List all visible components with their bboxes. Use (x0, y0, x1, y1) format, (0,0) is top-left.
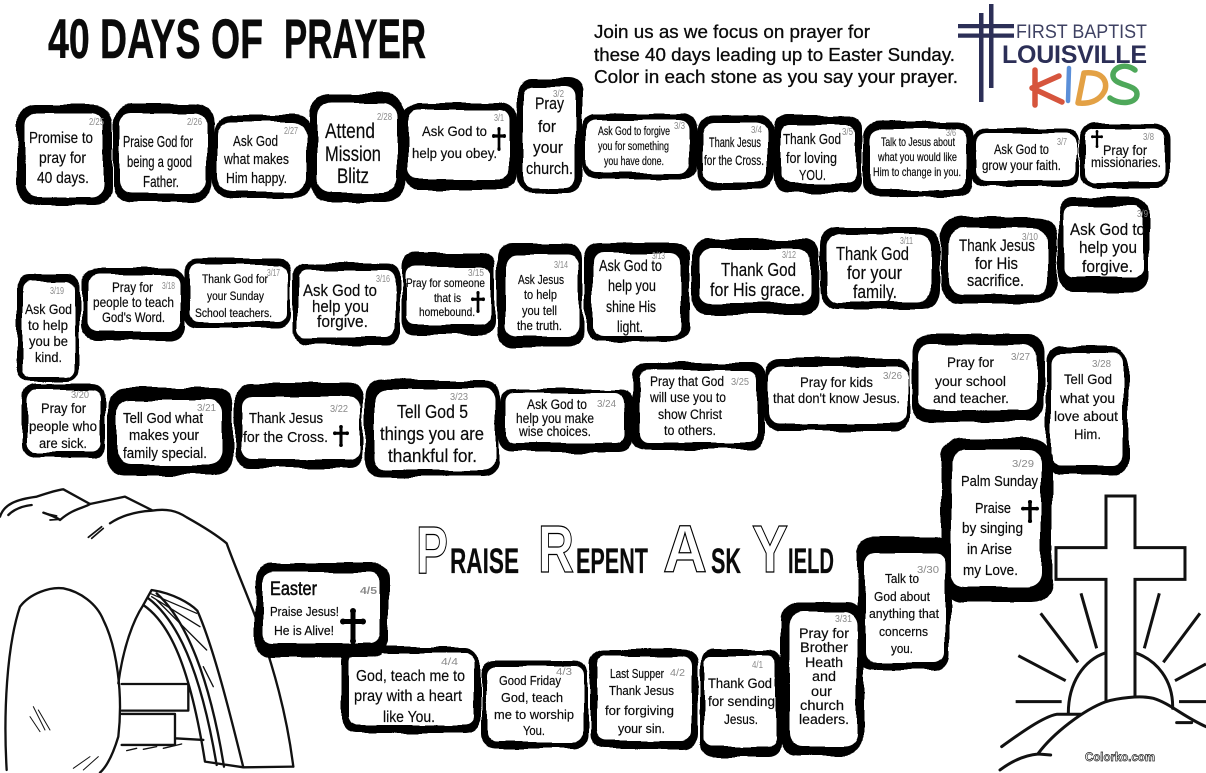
stone 4/2: Last Supper (610, 667, 664, 681)
stone 4/4: 4/4 (441, 657, 459, 668)
stone 3/26: Pray for kids (800, 374, 873, 390)
stone 3/5 (775, 115, 862, 193)
stone 3/28: Tell God (1064, 371, 1112, 387)
intro text: Join us as we focus on prayer for (594, 21, 870, 42)
stone 3/12: 3/12 (782, 250, 796, 261)
stone 3/21 (107, 388, 233, 475)
stone 3/31: leaders. (799, 712, 849, 727)
stone 3/19 (17, 275, 80, 382)
stone 3/12: for His grace. (710, 279, 805, 300)
stone 3/28: what you (1059, 390, 1115, 406)
stone 4/2: for forgiving (605, 704, 674, 718)
stone 3/22 (235, 383, 363, 468)
stone 3/9: Ask God to (1070, 220, 1145, 239)
stone 3/7 (972, 128, 1080, 187)
praise repent ask yield heading: R (538, 512, 574, 587)
stone 3/27 (912, 334, 1045, 422)
stone 3/24 (500, 389, 633, 452)
stone 3/7: grow your faith. (982, 158, 1061, 173)
stone 3/6: 3/6 (946, 128, 956, 139)
stone 3/5: 3/5 (842, 127, 853, 138)
stone 3/7: 3/7 (1057, 137, 1067, 148)
stone 4/3: You. (523, 723, 545, 738)
stone 3/25: 3/25 (731, 377, 749, 388)
stone 3/23: things you are (380, 424, 484, 444)
stone 3/21: family special. (123, 446, 207, 462)
stone 3/23: thankful for. (388, 446, 477, 466)
stone 3/3 (582, 113, 697, 180)
stone 3/5: for loving (786, 150, 837, 167)
stone 3/21: makes your (129, 428, 199, 444)
stone 3/30: concerns (879, 624, 928, 639)
stone 2/27: 2/27 (284, 126, 298, 137)
stone 3/20: Pray for (41, 401, 86, 416)
stone 4/3 (481, 660, 588, 749)
stone 3/31: Heath (805, 655, 843, 670)
stone 2/25: 40 days. (37, 170, 89, 187)
stone 3/31: and (812, 669, 836, 684)
stone 3/16 (293, 263, 400, 345)
praise repent ask yield heading: EPENT (576, 542, 648, 581)
stone 3/16: help you (312, 298, 369, 316)
stone 3/5: Thank God (783, 131, 841, 148)
stone 3/28 (1047, 346, 1128, 475)
icon: small cross (471, 291, 485, 313)
stone 2/25: Promise to (29, 130, 93, 147)
stone 4/5 Easter: Praise Jesus! (270, 604, 339, 619)
stone 3/20: 3/20 (71, 390, 89, 401)
stone 4/3: Good Friday (499, 673, 561, 688)
stone 3/17: Thank God for (202, 274, 268, 286)
stone 3/9: forgive. (1082, 257, 1133, 276)
stone 3/13: Ask God to (599, 258, 662, 275)
stone 2/26: being a good (127, 154, 192, 171)
stone 3/17: 3/17 (267, 268, 280, 279)
stone 3/1: Ask God to (422, 123, 487, 139)
stone 2/28: Blitz (337, 165, 369, 188)
stone 3/14: the truth. (517, 318, 562, 333)
stone 3/18: God's Word. (102, 309, 165, 325)
stone 3/10: Thank Jesus (959, 236, 1035, 255)
stone 3/23 (365, 380, 500, 477)
stone 4/2: Thank Jesus (609, 684, 674, 698)
stone 3/28: love about (1054, 408, 1118, 424)
stone 3/17: your Sunday (207, 291, 264, 303)
stone 3/8: 3/8 (1143, 132, 1154, 143)
stone 3/31 (780, 603, 864, 756)
stone 3/4 (697, 115, 775, 190)
stone 4/2: 4/2 (670, 668, 685, 679)
stone 4/1: Thank God (708, 675, 772, 691)
stone 3/24: Ask God to (527, 397, 587, 412)
stone 4/1: 4/1 (752, 660, 763, 671)
stone 3/27: 3/27 (1011, 352, 1030, 363)
stone 3/31: 3/31 (835, 614, 852, 625)
stone 3/2: Pray (535, 94, 564, 113)
stone 3/29: 3/29 (1012, 459, 1034, 470)
stone 4/5 Easter: 4/5 (360, 586, 378, 597)
stone 3/18: Pray for (112, 279, 153, 295)
praise repent ask yield heading: SK (711, 542, 741, 581)
stone 3/16: forgive. (317, 313, 368, 331)
intro text: these 40 days leading up to Easter Sunday. (594, 44, 955, 65)
icon: small cross (1091, 130, 1103, 148)
icon: small cross (1021, 500, 1039, 523)
stone 3/23: 3/23 (450, 392, 468, 403)
stone 3/15: homebound. (419, 305, 475, 319)
stone 3/29 (941, 438, 1052, 602)
stone 3/2: 3/2 (553, 89, 564, 100)
stone 3/27: your school (935, 373, 1006, 389)
stone 2/25 (17, 105, 112, 205)
stone 4/2 (590, 649, 698, 749)
stone 3/13: help you (608, 278, 656, 295)
intro text (594, 21, 958, 87)
logo: First Baptist Louisville Kids: FIRST BAPTIST (1016, 22, 1147, 43)
stone 3/13 (585, 243, 690, 342)
stone 4/2: your sin. (618, 722, 665, 736)
stone 3/15: that is (434, 291, 461, 305)
praise repent ask yield heading: A (663, 512, 707, 587)
stone 3/15 (402, 253, 495, 335)
stone 3/14: to help (524, 287, 557, 302)
stone 3/24: 3/24 (597, 399, 616, 410)
icon: small cross (492, 127, 506, 151)
stone 3/10: for His (975, 254, 1018, 273)
stone 4/1: Jesus. (724, 711, 758, 727)
stone 3/1: help you obey. (412, 145, 497, 161)
stone 3/2: church. (526, 159, 573, 178)
stone 3/26: that don't know Jesus. (773, 390, 900, 406)
stone 3/20 (23, 384, 105, 458)
stone 2/25: pray for (39, 150, 87, 167)
stone 3/26 (765, 358, 910, 431)
stone 3/28: Him. (1074, 426, 1101, 442)
title: 40 DAYS OF (48, 7, 263, 70)
stone 3/27: Pray for (947, 354, 994, 370)
stone 3/30: 3/30 (917, 565, 939, 576)
stone 3/9: help you (1079, 238, 1137, 257)
stone 3/30: Talk to (885, 571, 919, 586)
stone 3/19: you be (29, 333, 68, 349)
stone 3/11: Thank God (836, 244, 909, 264)
illustration: cross on hill with sun rays (1000, 496, 1206, 770)
stone 3/30: God about (874, 589, 930, 604)
icon: small cross (333, 425, 349, 447)
stone 3/14: 3/14 (554, 260, 568, 271)
stone 2/26: 2/26 (187, 117, 202, 128)
stone 4/5 Easter (255, 563, 389, 657)
icon: Easter cross (340, 608, 366, 644)
stone 3/28: 3/28 (1092, 359, 1111, 370)
stone 3/18: people to teach (93, 294, 174, 310)
stone 3/21: Tell God what (123, 411, 203, 427)
stone 3/13: shine His (606, 299, 656, 316)
title: PRAYER (284, 7, 426, 70)
stone 3/9: 3/9 (1137, 209, 1148, 220)
intro text: Color in each stone as you say your prayer. (594, 66, 958, 87)
stone 2/27: Him happy. (226, 170, 287, 187)
stone 3/30: anything that (869, 606, 939, 621)
watermark: Colorko.com: Colorko.com (1085, 750, 1155, 764)
stone 3/2: your (533, 138, 563, 157)
stone 3/27: and teacher. (933, 390, 1009, 406)
stone 4/3: God, teach (501, 690, 563, 705)
stone 3/1 (403, 103, 517, 190)
stone 3/14: Ask Jesus (518, 272, 564, 287)
stone 3/24: help you make (516, 411, 594, 426)
stone 3/23: Tell God 5 (397, 402, 468, 422)
stone 3/30 (857, 537, 950, 670)
stone 3/31: Pray for (799, 626, 850, 641)
stone 3/16: 3/16 (376, 274, 390, 285)
stone 2/27: what makes (223, 151, 289, 168)
stone 3/11: for your (847, 263, 902, 283)
stone 3/11: 3/11 (900, 236, 913, 247)
stone 3/11: family. (853, 282, 897, 302)
stone 3/9 (1058, 197, 1148, 292)
stone 4/1: for sending (708, 693, 775, 709)
stone 3/6 (863, 122, 973, 197)
praise repent ask yield heading: P (416, 513, 448, 588)
stone 2/28: 2/28 (377, 112, 392, 123)
praise repent ask yield heading: RAISE (450, 542, 519, 581)
stone 4/4: God, teach me to (356, 668, 465, 685)
stone 3/4: 3/4 (751, 125, 762, 136)
stone 3/25: Pray that God (650, 374, 724, 389)
stone 3/3: you for something (598, 141, 669, 153)
stone 3/17 (184, 258, 291, 328)
stone 3/17: School teachers. (195, 308, 272, 320)
stone 3/20: are sick. (39, 436, 87, 451)
stone 3/18: 3/18 (162, 281, 175, 292)
stone 3/8 (1081, 124, 1170, 188)
praise repent ask yield heading (416, 512, 834, 588)
stone 2/26 (113, 103, 213, 202)
stone 3/3: you have done. (604, 156, 664, 168)
stone 3/18 (82, 268, 185, 340)
stone 3/15: 3/15 (468, 268, 484, 279)
stone 4/4: like You. (383, 709, 435, 726)
stone 3/24: wise choices. (518, 424, 591, 439)
stone 3/29: by singing (962, 521, 1023, 537)
stone 2/28: Attend (325, 120, 375, 143)
stone 3/10: sacrifice. (967, 271, 1024, 290)
stone 3/16: Ask God to (303, 282, 377, 300)
stone 3/13: light. (617, 319, 643, 336)
stone 3/13: 3/13 (652, 251, 665, 262)
stone 4/5 Easter: Easter (270, 579, 318, 600)
stone 3/25: show Christ (658, 407, 722, 422)
stone 3/8: Pray for (1103, 143, 1147, 158)
stone 3/6: what you would like (877, 150, 957, 164)
stone 3/21: 3/21 (197, 403, 216, 414)
stone 3/6: Talk to Jesus about (881, 135, 955, 149)
stone 2/26: Praise God for (123, 134, 193, 151)
stone 3/22: for the Cross. (243, 429, 328, 446)
stone 3/11 (819, 227, 940, 309)
stone 3/3: 3/3 (674, 121, 685, 132)
stone 3/8: missionaries. (1091, 155, 1161, 170)
stone 3/25: to others. (664, 423, 716, 438)
stone 4/5 Easter: He is Alive! (274, 623, 334, 638)
stone 3/29: Praise (975, 501, 1011, 517)
stone 3/31: Brother (800, 640, 849, 655)
stone 2/27 (213, 115, 312, 198)
stone 2/28: Mission (325, 143, 381, 166)
stone 3/25: will use you to (649, 390, 726, 405)
stone 3/25 (632, 363, 765, 450)
stone 3/19: 3/19 (50, 286, 64, 297)
logo: First Baptist Louisville Kids: LOUISVILLE (1002, 41, 1147, 69)
stone 3/19: Ask God (25, 301, 72, 317)
stone 3/7: Ask God to (994, 142, 1049, 157)
stone 3/10: 3/10 (1022, 232, 1038, 243)
logo: First Baptist Louisville Kids (958, 4, 1147, 105)
stone 3/2: for (538, 117, 556, 136)
stone 3/22: 3/22 (330, 404, 348, 415)
stone 4/3: me to worship (494, 707, 574, 722)
praise repent ask yield heading: IELD (788, 542, 834, 581)
stone 3/1: 3/1 (494, 113, 504, 124)
praise repent ask yield heading: Y (752, 512, 788, 587)
stone 4/4: pray with a heart (354, 688, 463, 705)
stone 3/4: Thank Jesus (709, 134, 761, 150)
stone 2/28 (309, 94, 405, 202)
stone 3/14: you tell (522, 303, 557, 318)
stone 3/10 (941, 217, 1057, 303)
stone 3/12 (692, 239, 818, 315)
illustration: empty tomb (0, 489, 293, 773)
stone 4/1 (700, 649, 781, 757)
stone 3/29: in Arise (967, 542, 1012, 558)
stone 3/15: Pray for someone (406, 276, 485, 290)
stone 2/27: Ask God (233, 133, 278, 150)
stone 3/14 (497, 243, 583, 347)
stone 3/20: people who (29, 419, 97, 434)
stone 3/31: church (800, 698, 844, 713)
stone 3/12: Thank God (721, 259, 796, 280)
stone 3/19: kind. (35, 349, 62, 365)
stone 3/26: 3/26 (883, 371, 902, 382)
stone 3/19: to help (28, 317, 68, 333)
stone 3/4: for the Cross. (704, 152, 764, 168)
stone 3/29: my Love. (963, 563, 1018, 579)
stone 3/6: Him to change in you. (873, 165, 961, 179)
stone 4/4 (342, 647, 480, 733)
stone 3/31: our (811, 684, 833, 699)
stone 2/25: 2/25 (89, 117, 104, 128)
stone 3/2 (517, 78, 582, 193)
stone 3/29: Palm Sunday (961, 474, 1039, 490)
stone 3/3: Ask God to forgive (598, 126, 670, 138)
stone 3/22: Thank Jesus (249, 410, 323, 427)
stone 4/3: 4/3 (556, 667, 572, 678)
stone 3/30: you. (891, 641, 913, 656)
stone 2/26: Father. (143, 174, 179, 191)
stone 3/5: YOU. (799, 167, 826, 184)
